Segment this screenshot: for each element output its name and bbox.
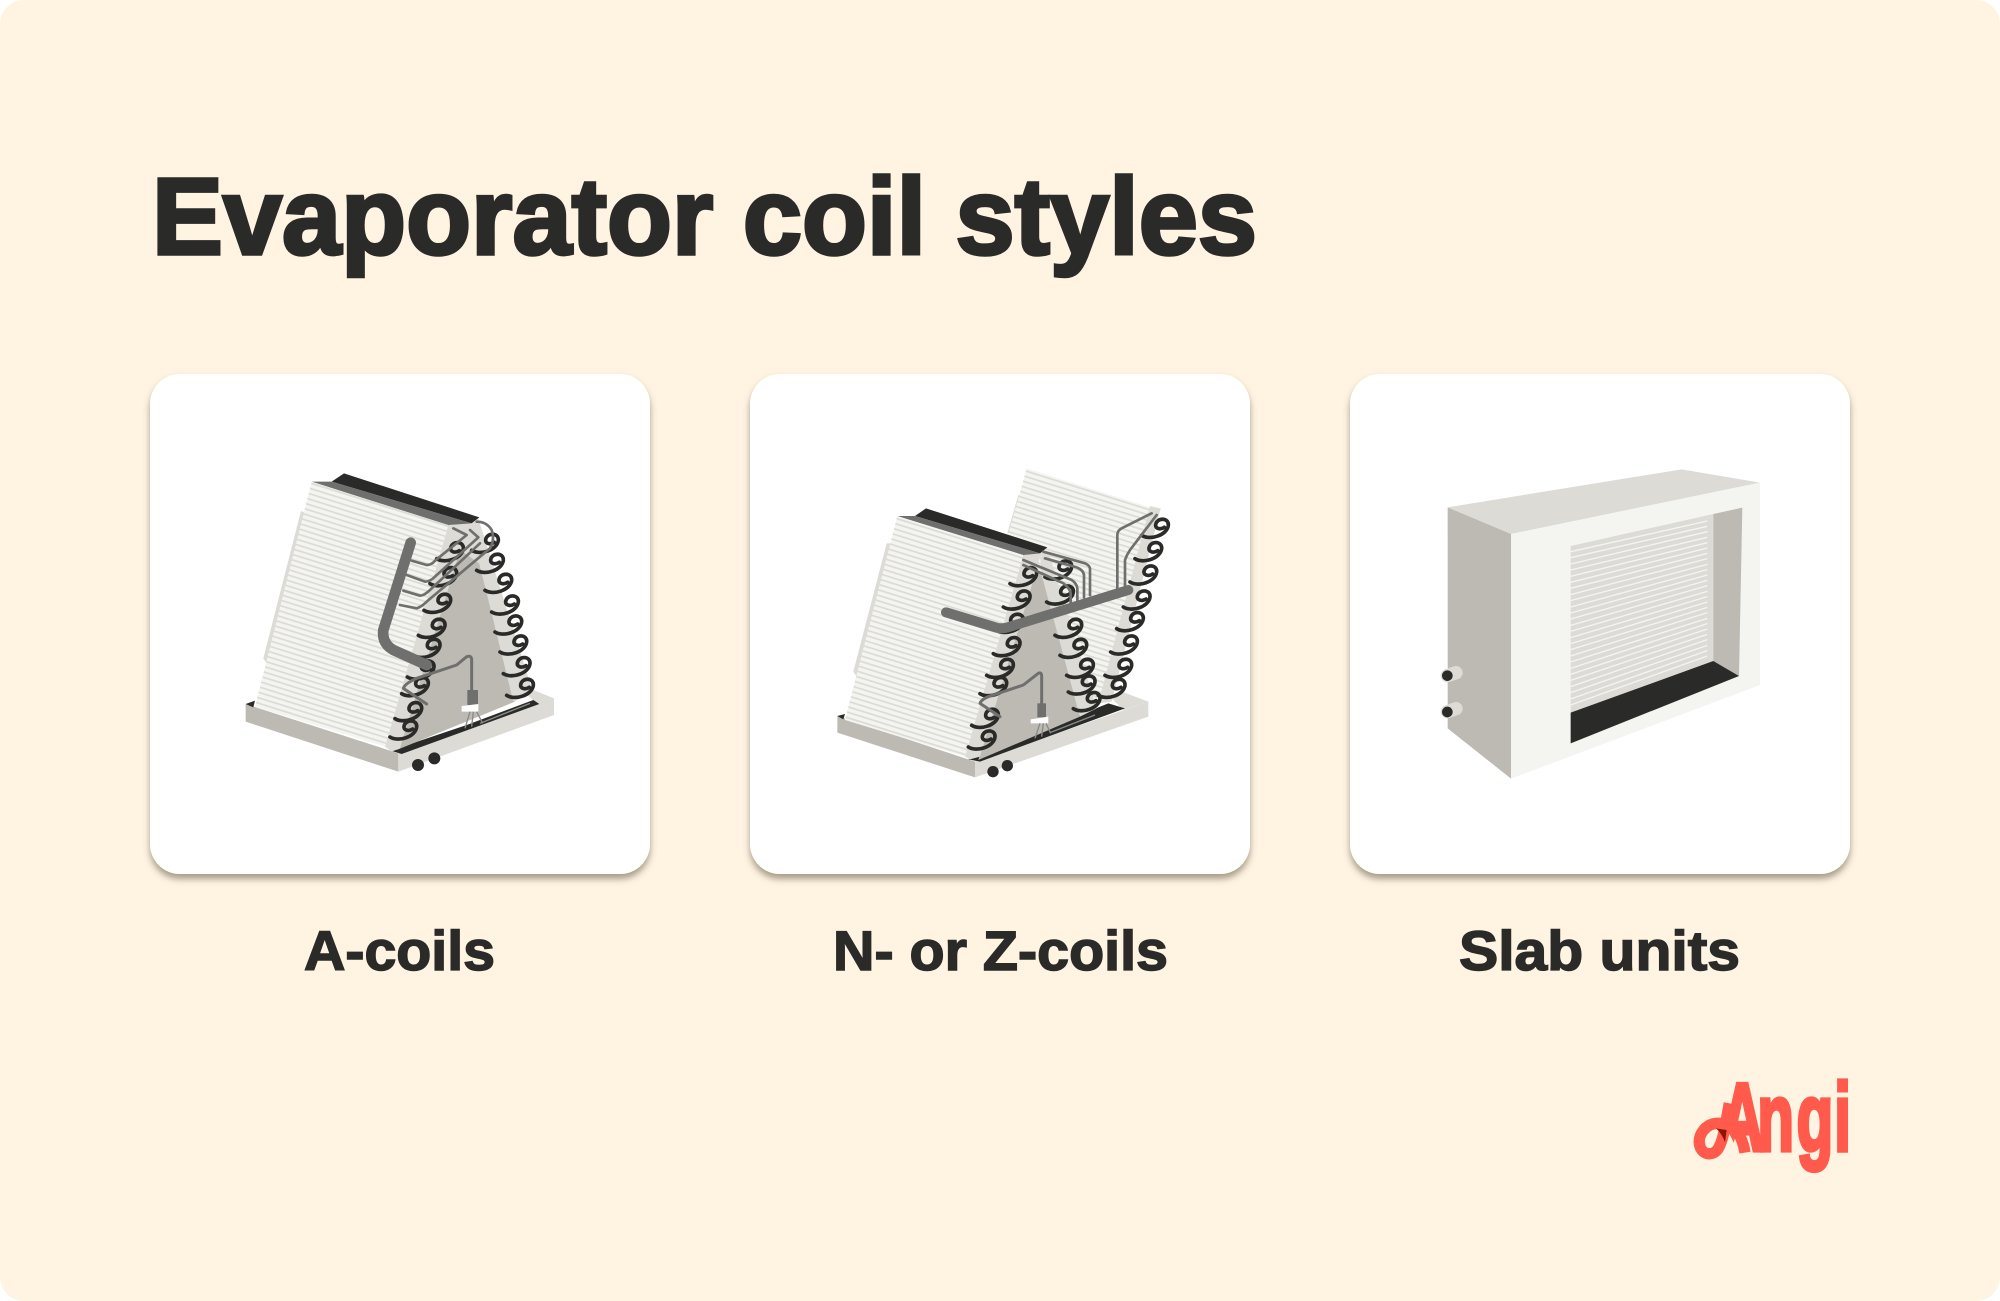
logo: Angi: Angi (1721, 1064, 1851, 1172)
icon: N-coil illustration (837, 468, 1168, 777)
card: A-coils (150, 374, 650, 874)
card: Slab units (1350, 374, 1850, 874)
panel: Slab units (1350, 374, 1850, 982)
panel: A-coils (150, 374, 650, 982)
label: N- or Z-coils: N- or Z-coils (833, 919, 1168, 982)
icon: A-coil illustration (246, 473, 554, 772)
panel: N- or Z-coils (750, 374, 1250, 982)
icon: slab unit illustration (1442, 469, 1760, 779)
label: Slab units: Slab units (1459, 919, 1740, 982)
title: Evaporator coil styles (152, 156, 1257, 278)
label: A-coils: A-coils (304, 919, 495, 982)
card: N- or Z-coils (750, 374, 1250, 874)
